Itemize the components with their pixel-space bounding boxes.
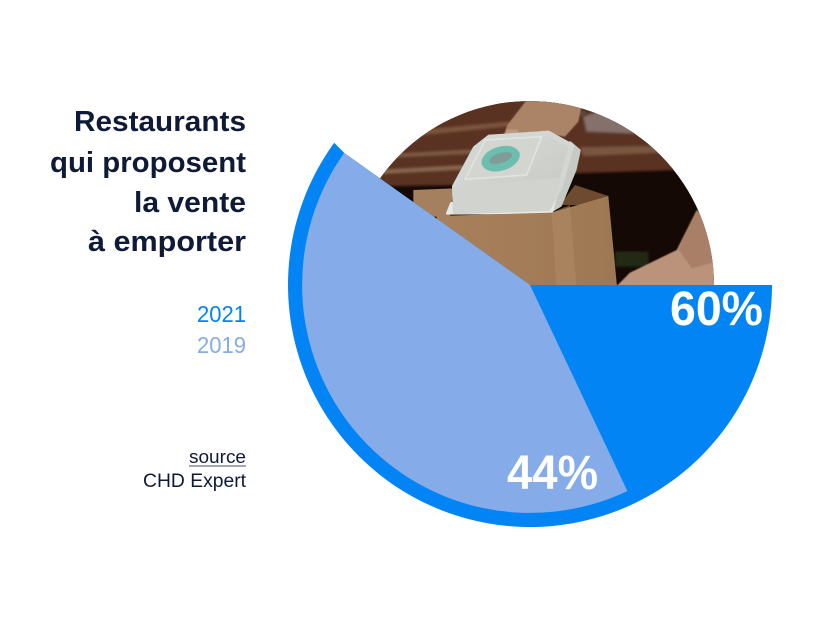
food box (447, 133, 579, 214)
value: 60%: 60% (670, 283, 763, 336)
legend (197, 301, 246, 358)
title: la vente (134, 187, 246, 219)
legend: 2019 (197, 332, 246, 358)
title: à emporter (88, 226, 246, 258)
photo: takeaway box placed in a paper bag (380, 101, 714, 285)
source: CHD Expert (143, 470, 247, 492)
paper bag front (437, 196, 617, 290)
value: 44%: 44% (507, 447, 598, 500)
title (50, 106, 246, 258)
title: qui proposent (50, 147, 246, 179)
legend: 2021 (197, 301, 246, 327)
hand holding the box (504, 101, 586, 137)
infographic (51, 101, 772, 527)
pie sector: 2019, 44% (302, 153, 627, 513)
title: Restaurants (74, 106, 246, 138)
paper bag back (413, 188, 453, 217)
source: source (189, 447, 246, 467)
lower hand (616, 210, 717, 290)
pie sector: 2021, 60% (288, 143, 772, 527)
source (143, 447, 247, 492)
